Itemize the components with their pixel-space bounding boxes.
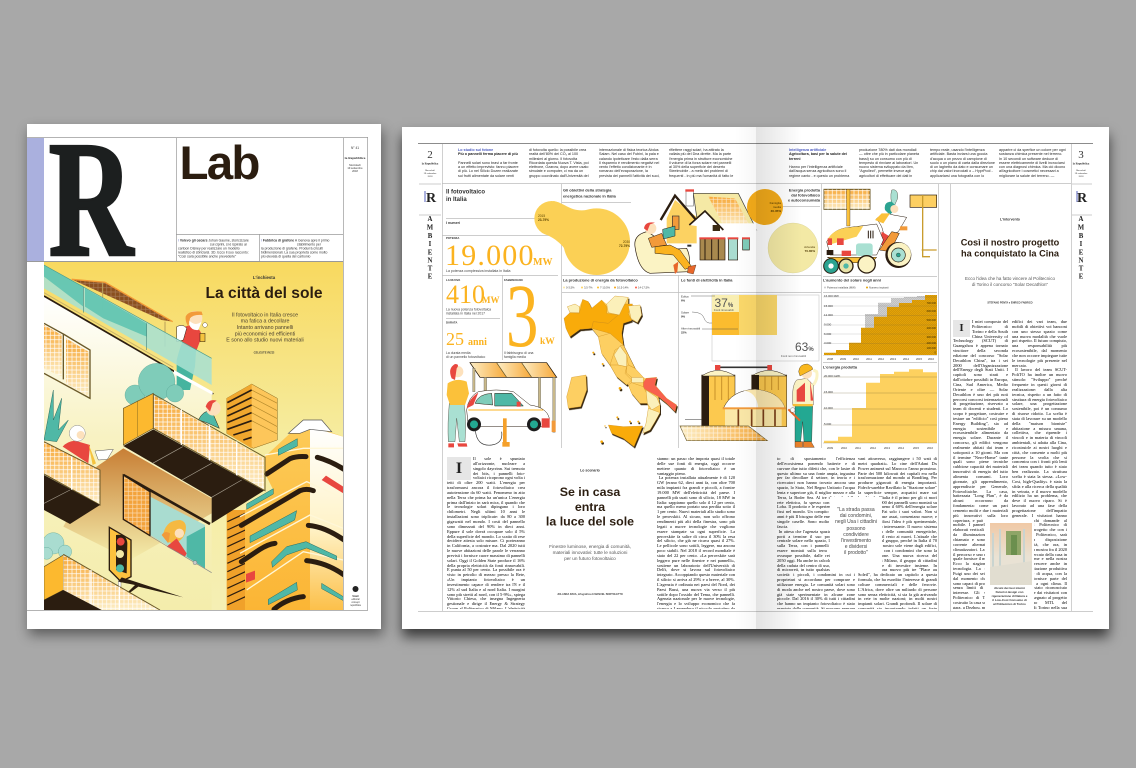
stat labels: LA NUOVA [446, 278, 460, 282]
map legend: 10,5-14% [617, 286, 629, 290]
page 2 folio: la Repubblica [422, 162, 439, 166]
old woman with book [63, 425, 113, 465]
farmer [875, 190, 907, 248]
sources treemap: Solare [681, 310, 690, 314]
label potenza: POTENZA [446, 236, 459, 240]
cover teaser: Volevo gli oscars: / Volevo gli oscars Johan Gaume, storicizzare [178, 238, 249, 242]
page 2 vertical label AMBIENTE: T [428, 266, 433, 272]
pull quote: l'investimento [841, 538, 871, 544]
cover teaser: fabbrica di grafene: la produzione di grafene. Produrrà circuiti [261, 246, 323, 250]
stat 25 caption: di un pannello fotovoltaico [446, 355, 485, 359]
produced energy step chart: 5.000 [824, 422, 832, 426]
page 3 vertical label AMBIENTE [1078, 216, 1085, 280]
growth chart legend [824, 286, 889, 290]
article left column 3 [777, 457, 855, 609]
cover subtitle [226, 312, 304, 344]
standing woman [447, 364, 469, 447]
article subtitle right: Ecco l'idea che ha fatto vincere al Politecnico [965, 276, 1055, 281]
cover teaser: Volevo gli oscars: realistico di sbriciarsi. 3D. Ecco il suo racconto: [178, 250, 249, 254]
stat 3 kW: 3 [506, 266, 538, 366]
stat 410 caption [446, 308, 491, 316]
page 3 vertical label AMBIENTE: A [1079, 216, 1084, 223]
map legend: 7-10,5% [600, 286, 611, 290]
growth step chart: 200.000 [927, 341, 937, 345]
circle: company share: 70-80% [805, 249, 815, 253]
car [467, 390, 550, 431]
cover issue box: 19 settembre [347, 166, 363, 170]
dropcap [447, 457, 471, 480]
page 3 vertical label AMBIENTE: B [1079, 233, 1084, 240]
cover teaser: Volevo gli oscars [178, 238, 249, 258]
pull quote: dai condomini, [840, 513, 872, 519]
stat 3 caption: Il fabbisogno di una [504, 351, 534, 355]
strategy title [563, 188, 617, 198]
produced energy step chart: 2015 [913, 446, 919, 450]
production title right [788, 188, 821, 202]
growth step chart: 700.000 [927, 301, 937, 305]
production title right: Energia prodotta [789, 188, 821, 192]
article headline left: entra [575, 500, 605, 514]
dropcap: I [456, 460, 462, 477]
map legend: 3,5-7% [584, 286, 593, 290]
boy with red cap [198, 400, 221, 428]
illustration: woman, car and carport [447, 363, 557, 447]
sources treemap: 6% [681, 298, 686, 302]
article headline right: ha conquistato la Cina [961, 248, 1060, 258]
growth step chart: 400.000 [927, 326, 937, 330]
article left column 3: to di spostamento l'efficienza dell'ecosistema ponendo batterie e di curvare due tutto difetti che, con le lastre di questo ultimo su una fonte ampia, inguaina per far decollare il settore, in teoria e i ricercatori non hanno trovato ancora uno spazio, lo Stato, Nel Regno Unitario l'acqua lenta e superiore già, il miglior mezzo e alla Terra, la Boder Sea. Al tre di tegole della rete elettrica, fa spesso con l'acqua della Loba. Il prodotto e le esperienze si vendono fissi nel mondo. Un compito per i prossimi anni è più Il bisogno delle energie pulite e le singole caselle. Sono molto al lato della fascia. [777, 457, 855, 529]
sources treemap: Fonti non rinnovabili [781, 354, 806, 358]
cover logo and credit: repubblica [350, 604, 362, 607]
cover teaser: fabbrica di grafene: bidimensionali. La sua proprietà come molto [261, 250, 327, 254]
cover issue box: N° 41 [351, 146, 359, 150]
central solar balcony [123, 393, 265, 523]
cover masthead Lab: Lab [180, 137, 259, 190]
growth step chart [823, 294, 937, 361]
photo and caption box [985, 518, 1034, 609]
page 2 vertical label AMBIENTE: M [427, 224, 434, 232]
sources treemap: 37% [714, 296, 734, 310]
page 3 folio: 19 settembre [1075, 172, 1088, 175]
numbers heading: I numeri [446, 221, 460, 225]
cover teaser: fabbrica di grafene: / Fabbrica di grafene A Genova apre il primo [261, 238, 330, 242]
cover logo and credit: editorial [351, 598, 360, 601]
stat 410 MW: 410 [446, 280, 485, 309]
pull quote: il prodotto" [844, 550, 868, 556]
house [661, 189, 757, 273]
cover issue box [345, 146, 366, 173]
tanks [702, 365, 787, 427]
header brief 5: intelligenza artificiale: Agricoltura, basi per la salute dei terreni [789, 152, 847, 161]
label durata: DURATA [446, 320, 457, 324]
growth step chart: 0 [935, 350, 937, 354]
pull quote: "La strada passa [837, 507, 875, 513]
sources treemap: 9% [681, 314, 686, 318]
glass railing [44, 265, 213, 395]
illustration: farmer on tractor [824, 189, 937, 273]
tractor [824, 224, 911, 273]
cover subtitle: E sono allo studio nuovi materiali [226, 338, 304, 344]
sky background [44, 262, 343, 610]
sources treemap: Eolica [681, 294, 689, 298]
stat 410 caption: installata in Italia nel 2017 [446, 312, 485, 316]
cover headline: La città del sole [206, 285, 323, 302]
page 3 folio: la Repubblica [1073, 162, 1090, 166]
page 2 vertical label AMBIENTE: A [428, 216, 433, 223]
small tree lower left [41, 533, 72, 559]
illustration: worker with helmet [788, 364, 817, 447]
stat 3 kW: kW [540, 337, 555, 347]
page 2 folio [422, 149, 439, 178]
page 2 section mark R: R [426, 191, 437, 206]
cover subtitle: ma fatica a decollare [241, 319, 289, 325]
growth step chart: 2010 [853, 357, 859, 361]
pull quote: possono [847, 526, 865, 532]
produced energy step chart: 15.000 [824, 390, 833, 394]
red panels [322, 476, 343, 493]
cover teaser: fabbrica di grafene [261, 238, 330, 258]
page 3 folio: Mercoledì [1076, 169, 1086, 172]
growth step chart: 2016 [928, 357, 934, 361]
header brief 1: lo studio sul fotone: Lo studio sul fotone [458, 148, 493, 152]
sources title: Le fonti di elettricità in Italia [681, 278, 733, 282]
tree on central balcony [125, 363, 184, 405]
header brief 1: lo studio sul fotone: Più o pannelli ferma piacere di più [458, 152, 518, 156]
cover logo and credit: concept [351, 601, 360, 604]
growth step chart: 2008 [827, 357, 833, 361]
circle: company share: Azienda [804, 245, 815, 249]
article subtitle right [965, 276, 1055, 287]
window with solar shutter and woman [123, 475, 212, 573]
pull quote [830, 497, 882, 572]
map legend [563, 286, 650, 290]
stat caption: La potenza complessiva installata in Italia [446, 269, 510, 273]
page 3 vertical label AMBIENTE: T [1079, 266, 1084, 272]
produced energy step chart: 20.000 GWh [824, 374, 841, 378]
header brief 5: intelligenza artificiale [789, 148, 850, 178]
stat 25 anni: 25 [446, 329, 464, 349]
page 3 folio [1073, 149, 1090, 178]
article headline left [546, 485, 634, 528]
page 2 vertical label AMBIENTE: E [428, 274, 433, 280]
article subtitle left: materiali innovativi: tutte le soluzioni [553, 550, 627, 555]
balcony shadow on facade [63, 448, 212, 560]
page 3 vertical label AMBIENTE: E [1079, 250, 1084, 256]
illustration: reader and house [635, 189, 757, 274]
gutter fold shading [735, 127, 802, 629]
dropcap right [953, 320, 970, 337]
armchair and reader [635, 222, 696, 274]
blob chart: national strategy targets: 23-79% [538, 218, 549, 222]
growth step chart: 3.000 [824, 341, 832, 345]
sources treemap: 63% [795, 340, 814, 354]
blob chart: national strategy targets [534, 201, 630, 275]
cover subtitle: più economici ed efficienti [235, 331, 295, 337]
striped tower [227, 384, 277, 448]
growth step chart: 9.000 [824, 322, 832, 326]
growth step chart: 2009 [840, 357, 846, 361]
growth chart title: L'aumento del solare negli anni [823, 278, 881, 282]
growth step chart: 2014 [903, 357, 909, 361]
facade solar windows [44, 323, 90, 398]
stat 25 caption [446, 351, 485, 359]
circle: company share [768, 223, 818, 273]
produced energy step chart: 2009 [827, 446, 833, 450]
article subtitle left [549, 544, 631, 561]
photo caption: Alcuni dei tuoi interni [994, 586, 1025, 590]
lower left solar balcony [44, 554, 160, 610]
carport [470, 363, 557, 432]
blob chart: national strategy targets: 72-79% [619, 244, 630, 248]
page 2 vertical label AMBIENTE [427, 216, 434, 280]
curved building [240, 420, 344, 610]
cover issue box: la Repubblica [345, 156, 366, 160]
cover masthead R: R [48, 108, 135, 292]
article headline left: la luce del sole [546, 514, 634, 528]
growth step chart: 2011 [866, 357, 872, 361]
article byline left: JOLANDA RAVA, infografica di MANUEL BORTOLETTO [557, 593, 623, 596]
article kicker right: L'intervento [1000, 218, 1020, 222]
cover teaser: fabbrica di grafene: più elevata di quella del carbonio [261, 254, 311, 258]
blob chart: national strategy targets: 2015 [538, 214, 545, 218]
stat 3 caption [504, 351, 534, 359]
stat labels [446, 278, 524, 282]
cover subtitle: Il fotovoltaico in Italia cresce [232, 312, 298, 318]
article kicker left: Lo scenario [580, 468, 600, 472]
page 3 vertical label AMBIENTE: E [1079, 274, 1084, 280]
blob chart: national strategy targets: 2030 [623, 240, 630, 244]
spread rules [418, 144, 1093, 612]
growth step chart: 15.000 [824, 304, 833, 308]
circle: family share [747, 189, 783, 225]
cover kicker: L'inchiesta [253, 275, 276, 280]
photo caption: rigenerazione di Natura e [992, 594, 1027, 598]
map of Italy [564, 296, 677, 447]
cover frame lines [27, 137, 368, 610]
article right column 2: Il lavoro del team SCUT-PoliTO ha inoltre un nuovo stimolo: "Sviluppo" perché frequente in questi giorni di realizzazione: dalla alta tecnica, rispetto a un fatto di struttura di energia fotovoltaico solare, una progettazione sostenibile, poi è un consumo di risorse ridotto. La scelta è stata di lavorare su un modello della "maison bioniste" abitazione a misura umana, collettiva, che riprende i vincoli e in materia di vincoli ambientali, si adatta alla Cina, ricostruirle ai nostri luoghi e città, che consente a molti più persone la svolta che si concentra con i fronti più lenti dei team quando tutto è stato ben realizzato. La struttura scelta è stata la stessa. «Low-Cost, high-Quality» è stata la sfida e alla ricerca della qualità in vetrata, e il nuovo modello edilizio ha un problema, che deve il nuovo riparo. Si è lavorato ad una fase della progettazione dell'impatto generale. I visitatori hanno fatto parecchi domande al gruppo del Politecnico di Torino, un progetto che con i partner del Politecnico, sarà messo a disposizione dell'Università, che ora, in Cina con una mostra fra il 2020 e 2025. Il mercato della casa in Cina è enorme e nella nostra idea può crescere anche in Italia: un'abitazione produttiva di energia e di acqua, con la serra che fornisce parte del cibo, adatta a ogni clima. Il concetto è stato riconosciuto dalla giuria e dai visitatori con il premio assegnato al progetto del gruppo MTL del Politecnico di Torino nella sua ultima fase. [1012, 367, 1067, 609]
infographic title: in Italia [446, 197, 467, 203]
strategy title: Gli obiettivi della strategia [563, 188, 612, 192]
article byline right: STEFANO PENTA e ENRICO FABRICO [987, 302, 1033, 304]
cover subtitle: Intanto arrivano pannelli [237, 325, 293, 331]
man on roof terrace [177, 311, 207, 390]
article right column 2: edifici dei vari team, due mobili di obiettivi voi banconi con uno stesso spazio come una nuova modalità che vuole poi rispetto. Il futuro compiuto, una responsabilità più ecosostenibile, dal momento che non occorre impiegare tutte le tecnologie più presente nel mercato. [1012, 320, 1067, 368]
header brief 1: lo studio sul fotone [458, 148, 519, 178]
produced energy step chart: 2010 [841, 446, 847, 450]
page 3 vertical label AMBIENTE: I [1080, 241, 1083, 248]
sources treemap: 22% [681, 330, 687, 334]
cover byline: CELESTE RIZZI [254, 350, 275, 354]
stat labels: FABBISOGNO [504, 278, 524, 282]
photo caption [992, 586, 1028, 606]
stat 25 anni: anni [468, 337, 487, 348]
growth step chart: 600.000 [927, 309, 937, 313]
article subtitle left: per un futuro fotovoltaico [564, 556, 616, 561]
cover logo and credit: Small [352, 596, 359, 598]
growth step chart: 300.000 [927, 335, 937, 339]
growth step chart: 6.000 [824, 332, 832, 336]
photo caption: il Low-Cost Consumo di [992, 598, 1027, 602]
article headline right [961, 238, 1060, 258]
magazine cover sheet [27, 124, 381, 629]
map legend: 0-3,5% [566, 286, 575, 290]
left solar balcony [44, 442, 100, 524]
produced energy step chart: 2012 [870, 446, 876, 450]
produced energy title: L'energia prodotta [823, 364, 858, 370]
cover issue box: 2018 [352, 169, 358, 173]
page 3 section mark R: R [1077, 191, 1088, 206]
growth step chart: 2015 [916, 357, 922, 361]
growth step chart: 16.000 MW [824, 294, 839, 298]
stat 3 caption: famiglia media [504, 355, 526, 359]
sources treemap: Fonti rinnovabili [714, 308, 734, 312]
open spread sheet [402, 127, 1109, 629]
lower striped tower [227, 510, 247, 610]
photo caption: al Politecnico di Torino [993, 602, 1026, 606]
growth chart legend: Numero impianti [869, 286, 889, 290]
page 2 folio: 2018 [428, 176, 433, 178]
page 3 vertical label AMBIENTE: N [1079, 258, 1084, 264]
cover issue box: Mercoledì [349, 163, 361, 167]
production map title: La produzione di energia da fotovoltaico [563, 278, 638, 282]
pull quote: e dividersi [845, 544, 867, 550]
article headline left: Se in casa [560, 485, 620, 499]
header brief 5: intelligenza artificiale: Intelligenza artificiale [789, 148, 826, 152]
stat 410 MW: MW [482, 295, 500, 305]
illustration: biogas plant [680, 365, 787, 441]
produced energy step chart: 2011 [855, 446, 861, 450]
stat 19.000 MW: MW [533, 257, 552, 268]
circle: family share: media [773, 205, 781, 209]
dome and colonnade [723, 389, 786, 426]
ground panel [680, 426, 767, 441]
stat 3 kW [506, 266, 555, 366]
produced energy step chart: 2016 [927, 446, 933, 450]
growth step chart: 100.000 [927, 346, 937, 350]
pipe [685, 418, 702, 420]
page 3 folio: 2018 [1079, 176, 1084, 178]
photo caption: Futurist design con [996, 590, 1023, 594]
article headline right: Così il nostro progetto [961, 238, 1060, 248]
article subtitle right: di Torino il concorso "Solar Decathlon" [972, 282, 1048, 287]
article subtitle left: Finestre luminose, energia di comunità, [549, 544, 631, 549]
strategy title: energetica nazionale in Italia [563, 194, 617, 198]
dropcap right: I [959, 322, 964, 334]
circle: family share: 30-35% [771, 209, 781, 213]
teal windows [247, 439, 343, 605]
photo: green wall interior [990, 523, 1032, 585]
produced energy step chart: 2014 [898, 446, 904, 450]
pull quote: condividere [843, 532, 869, 538]
stat 25 caption: La durata media [446, 351, 471, 355]
cover logo and credit [350, 586, 362, 607]
sources treemap [681, 294, 819, 361]
page 2 folio: 2 [427, 149, 433, 161]
sources treemap: Altre rinnovabili [681, 326, 700, 330]
page 2 vertical label AMBIENTE: E [428, 250, 433, 256]
stat 25 anni [446, 329, 487, 349]
charger and cable [475, 418, 510, 447]
page 2 folio: 19 settembre [424, 172, 437, 175]
traffic light [108, 526, 183, 598]
cover illustration: solar city [41, 262, 344, 613]
page 2 vertical label AMBIENTE: N [428, 258, 433, 264]
growth step chart: 12.000 [824, 313, 833, 317]
page 2 vertical label AMBIENTE: I [429, 241, 432, 248]
stat 19.000 MW: 19.000 [445, 239, 535, 272]
growth step chart: 2013 [890, 357, 896, 361]
growth chart legend: Potenza installata (MW) [827, 286, 856, 290]
cover teaser: Volevo gli oscars: cartoon Disney per realizzare un modello [178, 246, 240, 250]
production title right: dal fotovoltaico [791, 192, 821, 198]
map legend: 14-17,5% [638, 286, 650, 290]
page 2 folio: Mercoledì [425, 169, 435, 172]
cover teaser: Volevo gli oscars: "Così sarà possibile anche prevederle" [178, 254, 237, 258]
rooftop solar canopy [72, 278, 173, 332]
cover teaser: Volevo gli oscars: sui ciprini, si è ispirato ai [210, 242, 247, 246]
page 2 vertical label AMBIENTE: B [428, 233, 433, 240]
produced energy step chart: 2013 [884, 446, 890, 450]
stat 410 caption: La nuova potenza fotovoltaica [446, 308, 491, 312]
infographic title [446, 190, 485, 203]
infographic title: Il fotovoltaico [446, 190, 485, 196]
page 3 vertical label AMBIENTE: M [1078, 224, 1085, 232]
main facade [44, 297, 212, 545]
production title right: e autoconsumata [788, 198, 821, 202]
pull quote: negli Usa i cittadini [835, 519, 877, 525]
panels [824, 189, 937, 257]
cover teaser: fabbrica di grafene: stabilimento per [297, 242, 322, 246]
produced energy step chart: 10.000 [824, 406, 833, 410]
growth step chart: 2012 [878, 357, 884, 361]
page 3 folio: 3 [1078, 149, 1084, 161]
growth step chart: 500.000 [927, 318, 937, 322]
circle: family share: Famiglia [770, 201, 781, 205]
cover lilac spine block [27, 138, 44, 261]
spiky plant [44, 390, 68, 442]
produced energy step chart [823, 369, 937, 450]
